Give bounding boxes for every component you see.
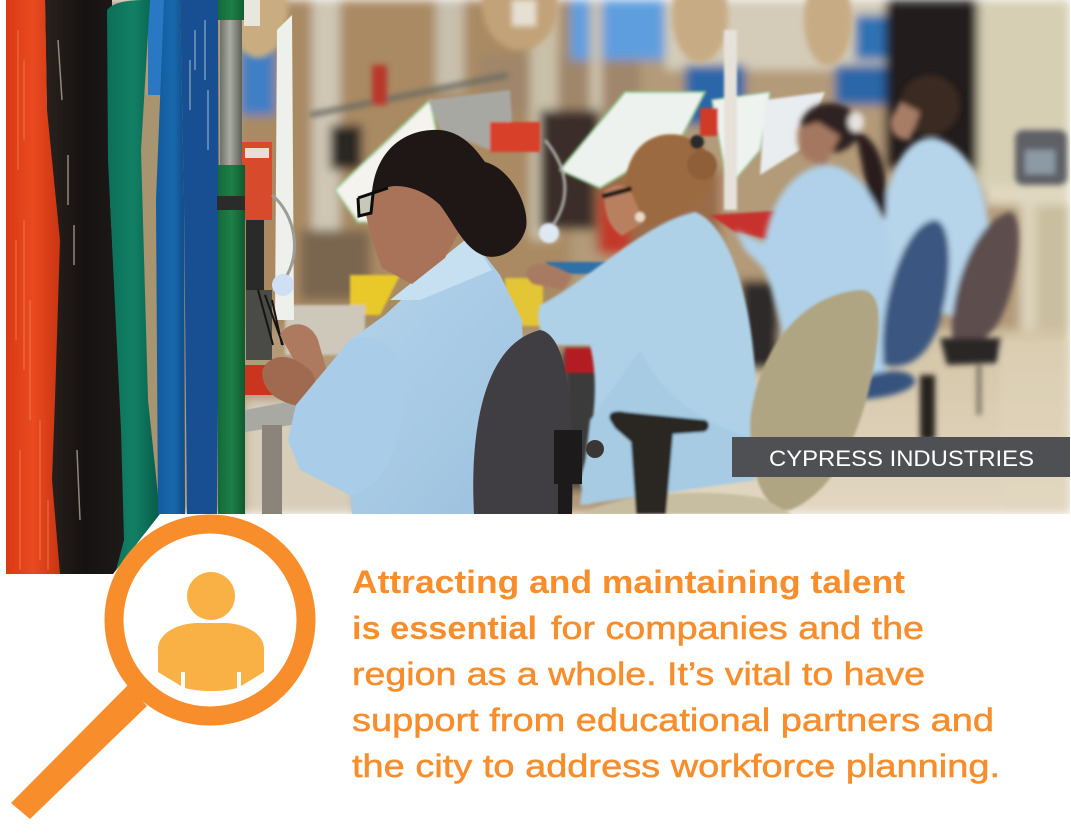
pipe	[218, 0, 245, 20]
armrest	[609, 411, 709, 514]
photo background	[6, 0, 1070, 514]
spools and far equipment	[228, 0, 1067, 185]
text block: talent message: for companies and the	[551, 610, 924, 646]
navy chair	[883, 220, 949, 366]
neck and face	[366, 186, 458, 284]
text block: talent message	[352, 564, 1000, 784]
dark chair	[952, 212, 1019, 347]
work-station paper stands	[285, 30, 825, 373]
text block: talent message: region as a whole. It’s vital to have	[352, 656, 925, 692]
blue wires	[156, 0, 185, 514]
white panel strip	[275, 15, 294, 320]
glasses	[358, 188, 388, 216]
hair	[372, 130, 527, 257]
green wires	[107, 0, 160, 574]
icon: magnifying glass with person	[11, 524, 306, 819]
black wires	[45, 0, 125, 574]
panel: factory photo	[6, 0, 1070, 574]
gap fill between wires	[141, 95, 160, 486]
fore chair	[473, 330, 573, 514]
hanging wire bundles	[6, 0, 260, 574]
caption label	[732, 437, 1070, 477]
caption label: CYPRESS INDUSTRIES	[769, 446, 1034, 471]
far worker 1	[880, 138, 988, 320]
machine	[242, 142, 272, 220]
icon: person	[158, 572, 264, 691]
foreground worker	[242, 15, 604, 514]
middle worker	[527, 134, 879, 514]
text block: talent message: is essential	[352, 610, 537, 646]
text block: talent message: Attracting and maintaining talent	[352, 564, 905, 600]
text block: talent message: support from educational partners and	[352, 702, 994, 738]
hands	[280, 324, 328, 383]
text block: talent message: the city to address workforce planning.	[352, 748, 1000, 784]
far workers	[733, 74, 1061, 437]
lamp	[272, 195, 294, 280]
cable bundle	[258, 290, 283, 345]
beige chair	[750, 290, 879, 510]
coat	[288, 236, 523, 514]
bench rail	[245, 402, 296, 432]
far worker 2	[762, 165, 890, 395]
red wires	[6, 0, 60, 574]
